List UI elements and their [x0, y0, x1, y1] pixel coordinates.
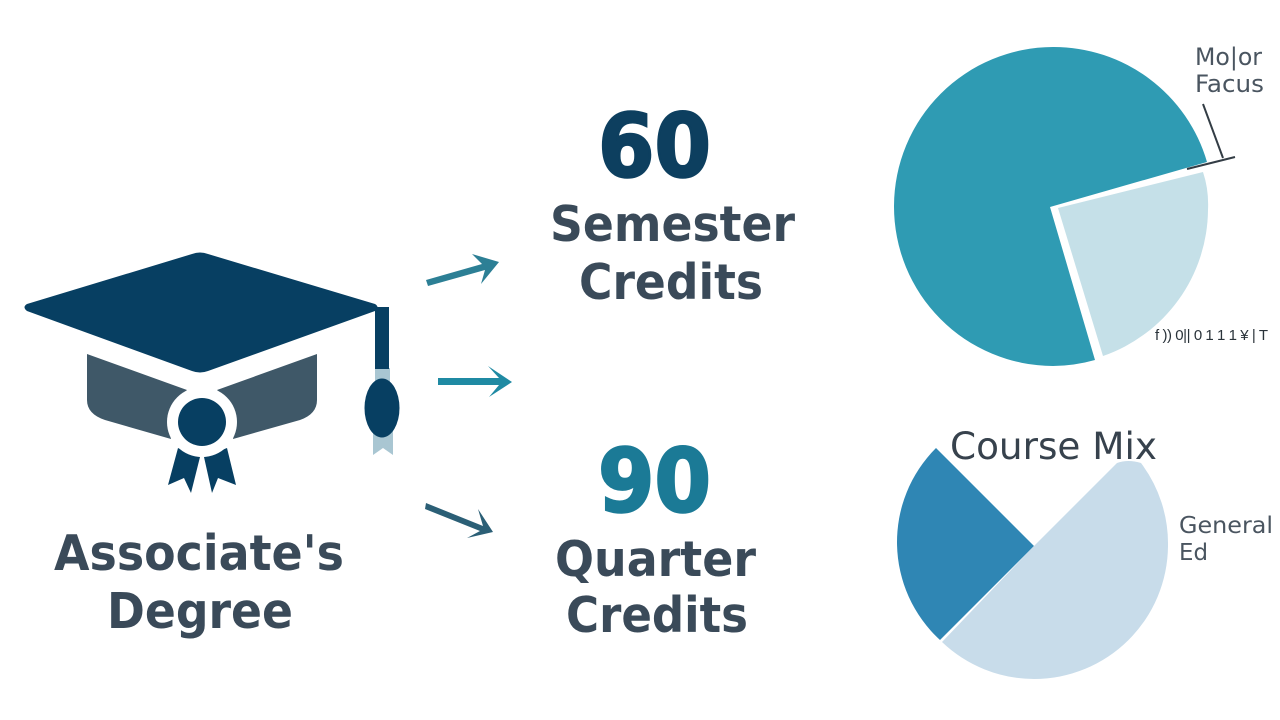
arrow: to semester credits: [426, 254, 499, 286]
stat: 60 semester credits: Semester: [550, 196, 796, 253]
small slice: [1058, 172, 1208, 356]
tassel: [373, 368, 393, 455]
leader line: [1187, 104, 1235, 169]
stat: 60 semester credits: 60: [598, 96, 711, 198]
heading: Associate's Degree: Degree: [107, 583, 293, 640]
stat: 60 semester credits: Credits: [579, 254, 763, 311]
arrow: middle: [438, 366, 512, 397]
heading: Associate's Degree: Associate's: [54, 525, 344, 582]
stat: 90 quarter credits: Credits: [566, 587, 748, 644]
icon: graduation cap with diploma seal: [24, 252, 400, 493]
label: general ed: Ed: [1179, 540, 1208, 566]
arrow: to quarter credits: [425, 503, 493, 538]
large slice: [894, 47, 1207, 366]
stat: 90 quarter credits: [555, 430, 757, 644]
cap board: [24, 252, 378, 372]
label: major focus: [1195, 43, 1264, 98]
pie chart: major focus: [894, 43, 1268, 366]
seal: [167, 387, 237, 457]
label: major focus: Facus: [1195, 70, 1264, 98]
stat: 60 semester credits: [550, 96, 796, 311]
label: general ed: [1179, 513, 1273, 566]
pie chart: course mix: [897, 425, 1273, 679]
heading: course mix: Course Mix: [950, 425, 1157, 468]
gown right: [217, 354, 317, 439]
stat: 90 quarter credits: 90: [598, 430, 711, 532]
garbled small label: f )) 0|| 0 1 1 1 ¥ | T: [1155, 327, 1268, 344]
label: major focus: Mo|or: [1195, 43, 1262, 71]
dark slice: [897, 448, 1034, 640]
stat: 90 quarter credits: Quarter: [555, 531, 757, 588]
ribbon tails: [168, 448, 236, 493]
light slice: [942, 461, 1168, 679]
gown left: [87, 354, 187, 439]
heading: Associate's Degree: [54, 525, 344, 640]
label: general ed: General: [1179, 513, 1273, 539]
